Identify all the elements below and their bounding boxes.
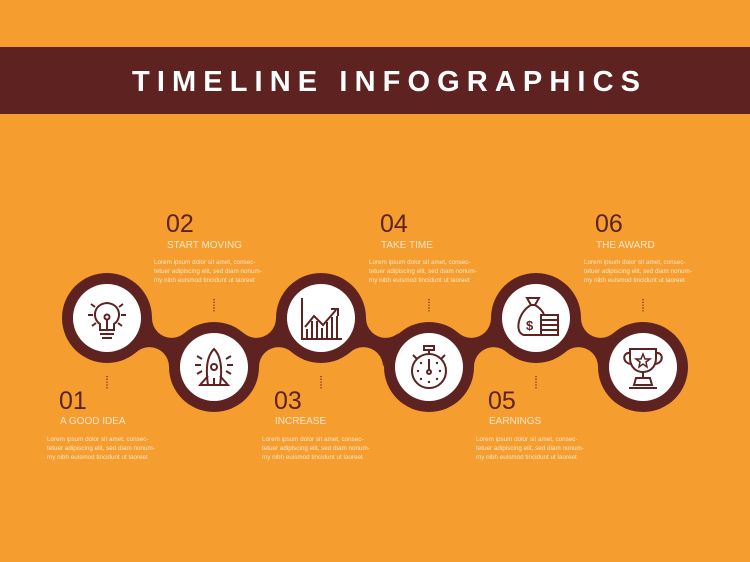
- step 04 text: my nibh euismod tincidunt ut laoreet: [369, 277, 470, 284]
- step 01 text: Lorem ipsum dolor sit amet, consec-: [47, 436, 148, 443]
- node 2: rocket: [169, 322, 259, 412]
- step 04 text: TAKE TIME: [381, 240, 433, 251]
- step 01 text: [47, 387, 155, 461]
- icon: money bag and coins: [518, 298, 558, 335]
- step 04 text: [369, 210, 477, 284]
- node 5: money: [491, 273, 581, 363]
- step 01 text: 01: [59, 387, 87, 415]
- step 04 text: tetuer adipiscing elit, sed diam nonum-: [369, 268, 477, 275]
- step 03 text: INCREASE: [275, 416, 326, 427]
- step 02 text: 02: [166, 210, 194, 238]
- title: TIMELINE INFOGRAPHICS: [132, 66, 640, 98]
- header band: [0, 47, 750, 114]
- icon: growth chart: [302, 298, 342, 339]
- step 05 text: tetuer adipiscing elit, sed diam nonum-: [476, 445, 584, 452]
- step 02 text: START MOVING: [167, 240, 242, 251]
- step 04 text: 04: [380, 210, 408, 238]
- step 03 text: tetuer adipiscing elit, sed diam nonum-: [262, 445, 370, 452]
- step 05 text: 05: [488, 387, 516, 415]
- step 06 text: [584, 210, 692, 284]
- step 03 text: my nibh euismod tincidunt ut laoreet: [262, 454, 363, 461]
- step 06 text: THE AWARD: [596, 240, 655, 251]
- timeline connector necks: [130, 299, 620, 386]
- node 1: idea: [62, 273, 152, 363]
- step 01 text: A GOOD IDEA: [60, 416, 126, 427]
- step 01 text: tetuer adipiscing elit, sed diam nonum-: [47, 445, 155, 452]
- node 3: chart: [276, 273, 366, 363]
- step 01 text: my nibh euismod tincidunt ut laoreet: [47, 454, 148, 461]
- step 02 text: Lorem ipsum dolor sit amet, consec-: [154, 259, 256, 266]
- step 05 text: Lorem ipsum dolor sit amet, consec-: [476, 436, 578, 443]
- step 04 text: Lorem ipsum dolor sit amet, consec-: [369, 259, 470, 266]
- step 06 text: my nibh euismod tincidunt ut laoreet: [584, 277, 685, 284]
- step 02 text: my nibh euismod tincidunt ut laoreet: [154, 277, 255, 284]
- step 05 text: EARNINGS: [489, 416, 542, 427]
- step 06 text: 06: [595, 210, 623, 238]
- icon: stopwatch: [412, 346, 446, 388]
- step 02 text: tetuer adipiscing elit, sed diam nonum-: [154, 268, 262, 275]
- step 05 text: [476, 387, 584, 461]
- step 03 text: [262, 387, 370, 461]
- icon: trophy: [624, 349, 662, 388]
- node 5: money: $: [526, 318, 534, 333]
- dotted connectors: [107, 299, 643, 390]
- step 06 text: tetuer adipiscing elit, sed diam nonum-: [584, 268, 692, 275]
- step 03 text: 03: [274, 387, 302, 415]
- step 02 text: [154, 210, 262, 284]
- step 06 text: Lorem ipsum dolor sit amet, consec-: [584, 259, 686, 266]
- step 05 text: my nibh euismod tincidunt ut laoreet: [476, 454, 577, 461]
- node 4: stopwatch: [384, 322, 474, 412]
- icon: light bulb: [88, 303, 126, 338]
- node 6: trophy: [598, 322, 688, 412]
- step 03 text: Lorem ipsum dolor sit amet, consec-: [262, 436, 364, 443]
- icon: rocket: [195, 349, 233, 386]
